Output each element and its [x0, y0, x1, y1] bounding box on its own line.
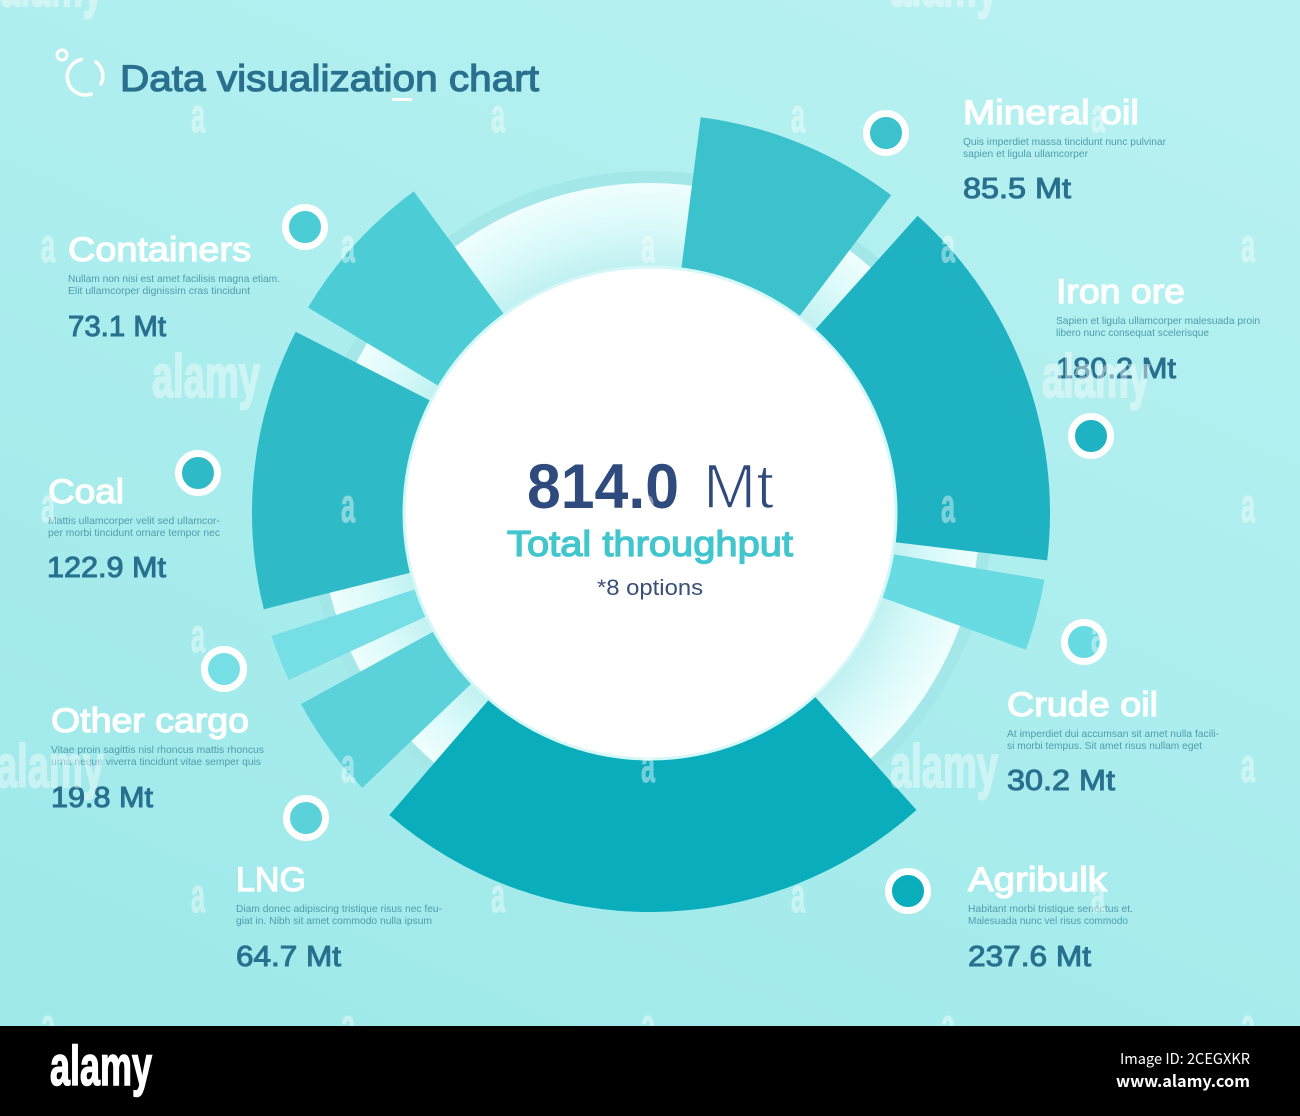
- watermark pattern: a: [1091, 870, 1105, 923]
- options note: *8 options: [597, 575, 703, 600]
- center white disc: [404, 267, 896, 759]
- watermark pattern: alamy: [890, 733, 998, 800]
- watermark pattern: a: [191, 870, 205, 923]
- segment: Agribulk: [389, 697, 916, 912]
- label: Crude oil: 30.2 Mt: [1007, 765, 1115, 797]
- label: Coal: Coal: [48, 473, 124, 511]
- watermark pattern: a: [1241, 1000, 1255, 1053]
- segment: Coal: [252, 332, 430, 609]
- icon: title ring: [57, 50, 103, 95]
- label: Crude oil: [1007, 686, 1219, 797]
- marker: LNG: [286, 798, 326, 838]
- segment: Other cargo: [272, 589, 426, 680]
- watermark pattern: a: [41, 220, 55, 273]
- label: Other cargo: Other cargo: [51, 702, 249, 740]
- label: Iron ore: 180.2 Mt: [1056, 353, 1176, 385]
- segment: Mineral oil: [681, 117, 891, 316]
- inner pale ring: [320, 183, 980, 843]
- label: Mineral oil: [963, 94, 1166, 205]
- watermark pattern: alamy: [1042, 343, 1150, 410]
- watermark pattern: a: [491, 90, 505, 143]
- segment: Crude oil: [882, 554, 1044, 650]
- watermark pattern: a: [41, 1000, 55, 1053]
- label: Containers: Containers: [68, 231, 251, 269]
- label: Iron ore: [1056, 273, 1260, 385]
- marker: Coal: [178, 454, 218, 492]
- segment: Iron ore: [815, 216, 1050, 560]
- label: Coal: per morbi tincidunt ornare tempor nec: [48, 527, 220, 539]
- label: Agribulk: [968, 861, 1133, 973]
- label: Containers: Elit ullamcorper dignissim cras tincidunt: [68, 285, 250, 297]
- marker: Other cargo: [204, 650, 244, 688]
- label: Agribulk: Habitant morbi tristique senectus et.: [968, 903, 1133, 915]
- watermark pattern: a: [791, 90, 805, 143]
- unit: Mt: [703, 452, 775, 522]
- watermark pattern: a: [1241, 220, 1255, 273]
- website: www.alamy.com: [1116, 1068, 1250, 1092]
- label: Crude oil: At imperdiet dui accumsan sit amet nulla facili-: [1007, 728, 1219, 740]
- marker: Mineral oil: [866, 114, 906, 152]
- label: LNG: 64.7 Mt: [236, 941, 341, 973]
- title: Data visualization chart: [120, 58, 540, 99]
- watermark pattern: alamy: [152, 343, 260, 410]
- label: Iron ore: Sapien et ligula ullamcorper malesuada proin: [1056, 315, 1260, 327]
- marker: Iron ore: [1072, 416, 1110, 456]
- segment: LNG: [301, 632, 471, 788]
- watermark pattern: a: [1091, 610, 1105, 663]
- center total: [507, 452, 793, 600]
- label: Containers: [68, 231, 280, 343]
- watermark pattern: a: [41, 480, 55, 533]
- watermark pattern: a: [491, 870, 505, 923]
- footer bar: [0, 1026, 1300, 1116]
- segment: Containers: [308, 191, 504, 386]
- watermark pattern: a: [1241, 740, 1255, 793]
- watermark pattern: a: [791, 870, 805, 923]
- label: Iron ore: Iron ore: [1056, 273, 1185, 311]
- label: Containers: Nullam non nisi est amet facilisis magna etiam.: [68, 273, 280, 285]
- watermark pattern: a: [641, 220, 655, 273]
- marker: Crude oil: [1064, 622, 1104, 662]
- watermark pattern: a: [341, 480, 355, 533]
- label: Crude oil: si morbi tempus. Sit amet risus nullam eget: [1007, 740, 1202, 752]
- watermark pattern: a: [191, 90, 205, 143]
- label: LNG: [236, 861, 442, 973]
- watermark pattern: a: [641, 740, 655, 793]
- footer logo: alamy: [50, 1034, 152, 1097]
- watermark pattern: a: [941, 220, 955, 273]
- watermark pattern: a: [1241, 480, 1255, 533]
- label: Agribulk: Malesuada nunc vel risus commodo: [968, 915, 1128, 927]
- watermark pattern: a: [191, 610, 205, 663]
- label: Mineral oil: Quis imperdiet massa tincidunt nunc pulvinar: [963, 136, 1166, 148]
- label: Coal: [47, 473, 220, 584]
- watermark pattern: a: [941, 480, 955, 533]
- label: Mineral oil: sapien et ligula ullamcorper: [963, 148, 1088, 160]
- label: Other cargo: urna neque viverra tincidunt vitae semper quis: [51, 756, 261, 768]
- label: Other cargo: Vitae proin sagittis nisl rhoncus mattis rhoncus: [51, 744, 264, 756]
- watermark pattern: a: [641, 1000, 655, 1053]
- label: Containers: 73.1 Mt: [68, 311, 166, 343]
- label: Crude oil: Crude oil: [1007, 686, 1158, 724]
- marker: Agribulk: [888, 872, 928, 910]
- label: Other cargo: [51, 702, 264, 814]
- total label: Total throughput: [507, 523, 793, 564]
- label: Iron ore: libero nunc consequat scelerisque: [1056, 327, 1209, 339]
- label: Coal: 122.9 Mt: [47, 552, 166, 584]
- label: LNG: giat in. Nibh sit amet commodo nulla ipsum: [236, 915, 432, 927]
- label: LNG: Diam donec adipiscing tristique risus nec feu-: [236, 903, 442, 915]
- image id: Image ID: 2CEGXKR: [1120, 1048, 1250, 1069]
- label: Mineral oil: Mineral oil: [963, 94, 1139, 132]
- label: Mineral oil: 85.5 Mt: [963, 173, 1071, 205]
- watermark pattern: a: [341, 220, 355, 273]
- watermark pattern: a: [1091, 90, 1105, 143]
- label: Other cargo: 19.8 Mt: [51, 782, 153, 814]
- marker: Containers: [286, 208, 324, 246]
- label: Agribulk: 237.6 Mt: [968, 941, 1091, 973]
- outer halo ring: [308, 171, 992, 855]
- label: LNG: LNG: [236, 861, 306, 899]
- watermark pattern: a: [641, 480, 655, 533]
- watermark pattern: a: [341, 740, 355, 793]
- watermark pattern: a: [941, 1000, 955, 1053]
- label: Agribulk: Agribulk: [968, 861, 1108, 899]
- watermark pattern: a: [341, 1000, 355, 1053]
- donut chart: [252, 117, 1050, 912]
- watermark pattern: alamy: [0, 733, 104, 800]
- total value: 814.0: [527, 452, 679, 522]
- label: Coal: Mattis ullamcorper velit sed ullamcor-: [48, 515, 220, 527]
